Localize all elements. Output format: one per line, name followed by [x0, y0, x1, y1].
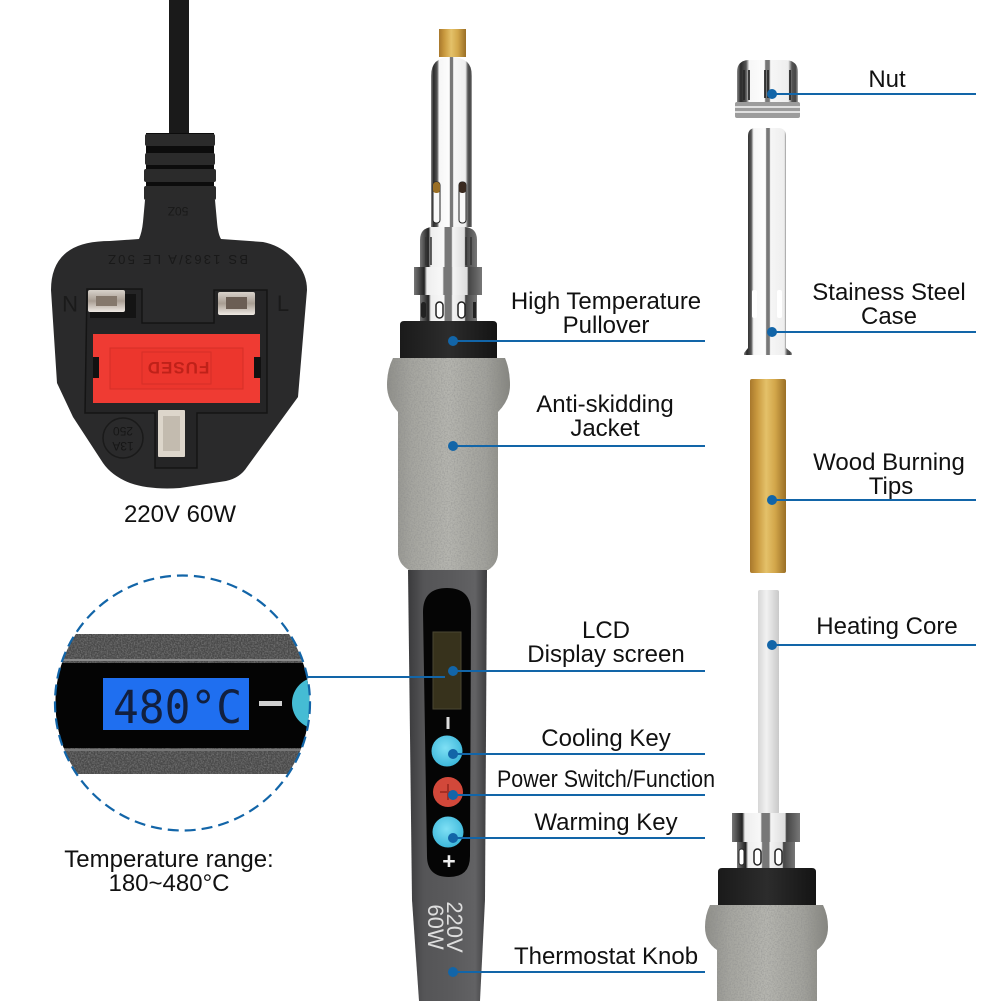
label: stainless steel case	[812, 279, 966, 330]
temperature range caption: Temperature range:	[64, 846, 274, 873]
exploded part: stainless steel case	[744, 128, 792, 355]
exploded part: iron base	[705, 813, 828, 1001]
knurled collar	[420, 227, 477, 267]
plug caption: 220V 60W	[124, 501, 236, 528]
power switch	[433, 777, 463, 807]
pullover	[718, 868, 816, 905]
label: wood burning tips: Tips	[869, 473, 913, 500]
minus sign	[446, 717, 450, 729]
temperature readout: 480°C	[113, 681, 242, 734]
leader: LCD callout	[307, 676, 445, 678]
leader: cooling key	[448, 749, 705, 759]
hex ring	[414, 267, 482, 295]
leader: heating core	[767, 640, 976, 650]
label: LCD display screen	[527, 617, 685, 668]
leader: LCD display	[448, 666, 705, 676]
power cord	[169, 0, 189, 134]
rating mark: 250	[113, 424, 133, 438]
label: stainless steel case: Stainess Steel	[812, 279, 966, 306]
leader: burning tips	[767, 495, 976, 505]
dashed border	[55, 576, 310, 830]
brass tip	[439, 29, 466, 57]
fuse cover: FUSED	[147, 358, 209, 377]
label: nut: Nut	[868, 66, 906, 93]
control panel	[423, 588, 471, 877]
cooling key	[432, 736, 462, 766]
leader: warming key	[448, 833, 705, 843]
warming key	[432, 816, 464, 848]
earth pin	[158, 410, 185, 457]
handle rating text	[423, 901, 467, 953]
leader: nut	[767, 89, 976, 99]
label: anti-skidding jacket: Jacket	[570, 415, 640, 442]
plug moulded text: BS 1363/A LE 50Z	[108, 252, 248, 267]
high temperature pullover	[400, 321, 497, 358]
steel case	[431, 57, 472, 227]
exploded part: brass burning tip	[750, 379, 786, 573]
leader: steel case	[767, 327, 976, 337]
rating mark: 13A	[112, 439, 134, 453]
LCD display	[103, 678, 249, 730]
label: heating core: Heating Core	[816, 613, 958, 640]
leader: power switch	[448, 790, 705, 800]
handle	[408, 570, 487, 1001]
live mark: L	[277, 291, 289, 316]
jacket	[705, 905, 828, 1001]
minus key mark	[259, 701, 282, 706]
LCD window	[433, 632, 461, 709]
handle rating text: 60W	[423, 904, 448, 950]
label: anti-skidding jacket	[536, 391, 674, 442]
slotted sleeve	[420, 295, 477, 321]
label: anti-skidding jacket: Anti-skidding	[536, 391, 674, 418]
exploded part: heating core	[758, 590, 779, 814]
slotted sleeve	[737, 842, 795, 868]
soldering iron	[387, 29, 510, 1001]
fuse recess	[85, 289, 267, 468]
label: high temperature pullover: Pullover	[563, 312, 649, 339]
leader: high temperature pullover	[448, 336, 705, 346]
plug strain relief	[144, 133, 216, 201]
label: wood burning tips	[813, 449, 965, 500]
label: LCD display screen: LCD	[582, 617, 630, 644]
label: wood burning tips: Wood Burning	[813, 449, 965, 476]
label: LCD display screen: Display screen	[527, 641, 685, 668]
rating mark	[103, 418, 143, 458]
live pin	[218, 292, 255, 315]
cord moulded mark: 50Z	[168, 204, 188, 218]
label: high temperature pullover	[511, 288, 701, 339]
handle rating text: 220V	[442, 901, 467, 953]
label: cooling key: Cooling Key	[541, 725, 671, 752]
label: power switch: Power Switch/Function	[497, 766, 715, 793]
power plug	[51, 0, 307, 488]
leader: thermostat knob	[448, 967, 705, 977]
plus sign: +	[442, 848, 456, 874]
plug body	[51, 200, 307, 488]
leader: anti-skidding jacket	[448, 441, 705, 451]
exploded part: nut	[735, 60, 800, 118]
label: thermostat knob: Thermostat Knob	[514, 943, 698, 970]
anti-skidding jacket	[387, 358, 510, 570]
fuse cover	[93, 334, 261, 403]
callout: LCD zoom circle	[54, 576, 344, 830]
neutral mark: N	[62, 291, 78, 316]
hex ring	[732, 813, 800, 842]
temperature range caption: 180~480°C	[108, 870, 230, 897]
label: warming key: Warming Key	[534, 809, 678, 836]
cyan key	[292, 679, 310, 726]
label: stainless steel case: Case	[861, 303, 917, 330]
temperature range caption	[64, 846, 274, 897]
handle band	[54, 634, 314, 774]
label: high temperature pullover: High Temperature	[511, 288, 701, 315]
neutral pin	[88, 290, 136, 318]
